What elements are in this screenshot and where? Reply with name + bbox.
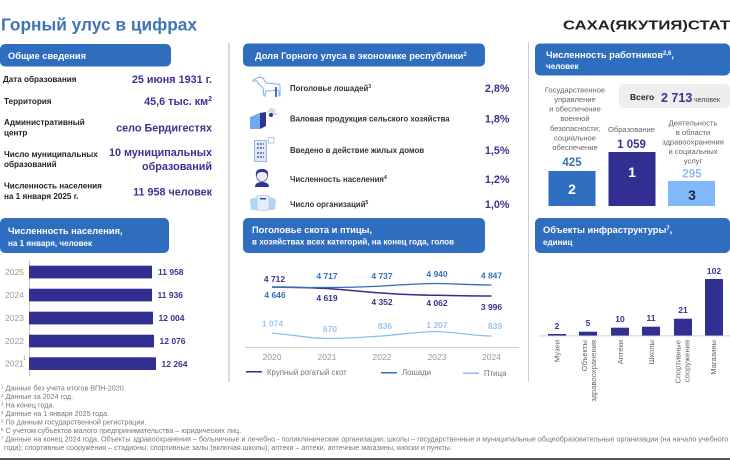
- column: government: обеспечение: [552, 143, 598, 152]
- column: education: 1: [628, 164, 636, 180]
- column: government: безопасности;: [550, 124, 600, 133]
- heading: share in economy: 2: [463, 52, 467, 58]
- row: agricultural output: 1,8%: [485, 114, 510, 126]
- row: founding date: 25 июня 1931 г.: [132, 74, 212, 86]
- row: organisations: Число организаций: [290, 200, 366, 209]
- icon: person: [255, 169, 269, 187]
- bar: 2021: 12 264: [162, 359, 188, 369]
- legend: Птица: [484, 369, 507, 378]
- line: cattle: 4 352: [371, 297, 393, 307]
- footnotes: Данные на 1 января 2025 года.: [4, 410, 109, 418]
- footnotes: С учетом субъектов малого предпринимательства – юридических лиц.: [4, 427, 241, 435]
- logo wordmark: САХА(ЯКУТИЯ)СТАТ: [563, 18, 730, 32]
- bar: 2021: 2021: [5, 358, 24, 368]
- axis labels: 2023: [428, 352, 447, 362]
- column: government: управление: [554, 95, 596, 104]
- heading: livestock: в хозяйствах всех категорий, на конец года, голов: [252, 238, 454, 246]
- column: government: 2: [568, 181, 576, 197]
- footnotes: Данные без учета итогов ВПН-2020.: [4, 384, 126, 392]
- heading: livestock: [243, 218, 485, 253]
- row: territory: 45,6 тыс. км: [144, 96, 208, 108]
- row: territory: Территория: [4, 97, 52, 106]
- axis labels: 2020: [263, 352, 282, 362]
- bar chart: population: [5, 266, 188, 370]
- row: housing: [290, 145, 510, 157]
- row: population share: 1,2%: [485, 174, 510, 186]
- total box: [619, 84, 730, 108]
- column: health: услуг: [684, 156, 702, 166]
- row: municipalities: 10 муниципальных: [109, 147, 212, 159]
- row: housing: Введено в действие жилых домов: [290, 146, 424, 155]
- heading: livestock: Поголовье скота и птицы,: [252, 225, 372, 235]
- column: health: в области: [676, 128, 710, 137]
- legend: [246, 368, 507, 378]
- bar: 2024: [5, 289, 183, 301]
- row: founding date: [3, 74, 212, 86]
- bar: pharmacies: [611, 314, 629, 364]
- icon: apartment building: [254, 138, 274, 162]
- heading: employees: 2,6: [663, 51, 672, 57]
- column: health: 3: [688, 187, 696, 203]
- column: health: 295: [682, 168, 702, 180]
- bar: 2023: 2023: [5, 313, 24, 323]
- heading: population: на 1 января, человек: [8, 239, 93, 248]
- column: government: военной: [560, 114, 590, 123]
- bar: 2025: [5, 266, 184, 278]
- row: agricultural output: Валовая продукция сельского хозяйства: [290, 114, 450, 124]
- bar: 2023: 12 004: [158, 313, 185, 323]
- row: population: Численность населения: [4, 182, 102, 190]
- row: administrative centre: центр: [4, 128, 27, 138]
- footnotes: По данным государственной регистрации.: [4, 418, 146, 426]
- row: organisations: [290, 199, 510, 211]
- bar: health facilities: [579, 318, 598, 402]
- panel: livestock: [243, 218, 519, 378]
- footnotes: 4: [1, 410, 4, 415]
- line: poultry: 1 207: [426, 320, 448, 330]
- line: cattle: [264, 274, 502, 312]
- row: horses: [290, 83, 510, 95]
- bar: 2024: 2024: [5, 290, 24, 300]
- heading: infrastructure: ,: [670, 225, 672, 235]
- total box: Всего: [630, 92, 654, 102]
- axis labels: 2022: [373, 352, 392, 362]
- panel: share in republic economy: [243, 44, 510, 211]
- bar: 2022: 2022: [5, 336, 24, 346]
- column: education: [608, 125, 656, 206]
- heading: employees: ,: [671, 50, 674, 60]
- bar: sports facilities: Спортивные: [674, 340, 683, 384]
- legend: Лошади: [402, 368, 431, 377]
- heading: share in economy: Доля Горного улуса в экономике республики: [255, 51, 463, 61]
- row: horses: 3: [368, 84, 371, 90]
- line: cattle: 3 996: [481, 302, 502, 312]
- bar: shops: Магазины: [709, 340, 718, 375]
- footnotes: 6: [1, 427, 4, 432]
- row: founding date: Дата образования: [3, 74, 77, 84]
- column: government: социальное: [554, 134, 596, 142]
- bar: sports facilities: сооружения: [683, 340, 692, 382]
- column: education: 1 059: [617, 139, 646, 151]
- bar: 2021: 1: [23, 356, 26, 362]
- line: poultry: 836: [378, 321, 392, 331]
- row: municipalities: образований: [142, 161, 212, 173]
- heading: infrastructure: 7: [666, 226, 670, 232]
- bar: 2022: 12 076: [160, 336, 186, 346]
- heading: employees: [535, 44, 730, 76]
- line: horses: 4 847: [481, 270, 502, 280]
- footnotes: 1: [1, 384, 4, 390]
- footnotes: 3: [1, 402, 4, 406]
- line: poultry: 839: [488, 321, 502, 331]
- footnotes: года); спортивные сооружения – стадионы, спортивные залы (включая школы); аптеки – аптеки, аптечные магазины, киоски и пункты.: [4, 444, 452, 452]
- row: administrative centre: Административный: [4, 118, 85, 127]
- column: government: Государственное: [545, 86, 605, 94]
- bar: 2024: 11 936: [158, 290, 183, 300]
- column: health: [662, 118, 724, 206]
- column: education: Образование: [608, 125, 655, 134]
- bar: shops: 102: [707, 266, 721, 276]
- icon: farm box: [250, 107, 279, 129]
- footnotes: [1, 384, 728, 452]
- line: poultry: 670: [323, 324, 337, 334]
- bar: museums: Музеи: [552, 340, 562, 362]
- line: horses: 4 717: [316, 271, 338, 281]
- row: population share: 4: [384, 175, 387, 181]
- axis labels: 2024: [482, 352, 501, 362]
- row: municipalities: Число муниципальных: [4, 150, 98, 159]
- bar: museums: [548, 321, 566, 362]
- row: territory: 2: [208, 96, 212, 103]
- bar: 2025: 11 958: [158, 267, 184, 277]
- axis labels: 2021: [318, 352, 337, 362]
- row: municipalities: [4, 147, 212, 173]
- line: cattle: 4 062: [426, 298, 448, 308]
- column: government: [545, 86, 605, 206]
- line: horses: 4 737: [371, 271, 393, 281]
- icon: organisation building: [250, 196, 276, 210]
- bar: museums: 2: [555, 321, 560, 331]
- bar: schools: Школы: [647, 340, 656, 364]
- legend: Крупный рогатый скот: [267, 368, 347, 377]
- bar: 2021: [5, 356, 188, 370]
- row: housing: 1,5%: [485, 145, 510, 157]
- line chart: livestock: [245, 269, 519, 362]
- row: agricultural output: [290, 114, 510, 126]
- footnotes: 7: [1, 436, 4, 440]
- heading: infrastructure: [535, 218, 730, 253]
- row: population: на 1 января 2025 г.: [4, 192, 79, 201]
- column: government: и обеспечение: [549, 104, 601, 114]
- axis labels: [263, 352, 501, 362]
- line: horses: 4 940: [426, 269, 448, 279]
- bar: shops: [705, 266, 723, 375]
- bar: 2022: [5, 335, 186, 347]
- footnotes: 2: [1, 393, 4, 398]
- bar chart: infrastructure: [539, 266, 730, 402]
- column: health: и социальных: [668, 147, 718, 156]
- panel: population: [0, 218, 188, 376]
- panel: infrastructure: [535, 218, 730, 402]
- row: territory: [4, 96, 212, 108]
- row: organisations: 5: [366, 200, 368, 206]
- total box: человек: [694, 97, 721, 104]
- bar: schools: 11: [646, 313, 656, 323]
- panel: general information: [0, 44, 213, 201]
- title: Горный улус в цифрах: [1, 14, 197, 34]
- icon: horse: [253, 77, 280, 97]
- row: horses: Поголовье лошадей: [290, 84, 368, 93]
- total box: 2 713: [661, 91, 692, 105]
- heading: general information: [0, 44, 171, 66]
- heading: general information: Общие сведения: [8, 51, 86, 61]
- footnotes: Данные на конец 2024 года. Объекты здравоохранения – больничные и лечебно - поликлинические организации; школы – государственные и муниципальные общеобразовательные организации (на начало учебного: [4, 436, 728, 444]
- footnotes: На конец года.: [4, 402, 54, 410]
- heading: share in economy: [243, 44, 485, 66]
- row: municipalities: образований: [4, 159, 57, 169]
- row: organisations: 1,0%: [485, 199, 510, 211]
- line: poultry: 1 074: [262, 318, 283, 328]
- heading: employees: человек: [546, 62, 580, 71]
- heading: population: [0, 218, 169, 253]
- panel: employees: [535, 44, 730, 206]
- row: population share: Численность населения: [290, 175, 384, 184]
- column: health: Деятельность: [669, 118, 717, 128]
- bar: sports facilities: 21: [678, 305, 688, 315]
- row: population: 11 958 человек: [133, 186, 213, 198]
- bar: 2023: [5, 312, 185, 324]
- bar: health facilities: здравоохранения: [589, 340, 598, 402]
- line: horses: [264, 269, 502, 300]
- bar: pharmacies: Аптеки: [616, 340, 625, 364]
- row: population share: [290, 174, 510, 186]
- column: health: здравоохранения: [662, 138, 724, 146]
- line: poultry: [262, 318, 502, 338]
- footnotes: 5: [1, 418, 4, 424]
- heading: population: Численность населения,: [8, 226, 123, 236]
- column: government: 425: [562, 157, 582, 169]
- bar: pharmacies: 10: [615, 314, 625, 324]
- row: administrative centre: село Бердигестях: [116, 122, 212, 134]
- footnotes: Данные за 2024 год.: [4, 393, 73, 401]
- line: cattle: 4 712: [264, 274, 285, 284]
- bar: sports facilities: [674, 305, 692, 384]
- heading: employees: Численность работников: [546, 50, 663, 60]
- line: horses: 4 646: [264, 290, 286, 300]
- bar: 2025: 2025: [5, 267, 24, 277]
- line: cattle: 4 619: [316, 293, 338, 303]
- row: horses: 2,8%: [485, 83, 510, 95]
- bar: health facilities: 5: [586, 318, 591, 328]
- row: population: [4, 182, 213, 201]
- heading: infrastructure: Объекты инфраструктуры: [543, 225, 666, 235]
- bar: health facilities: Объекты: [580, 340, 589, 371]
- bar: schools: [642, 313, 660, 364]
- row: administrative centre: [4, 118, 212, 138]
- heading: infrastructure: единиц: [543, 238, 572, 247]
